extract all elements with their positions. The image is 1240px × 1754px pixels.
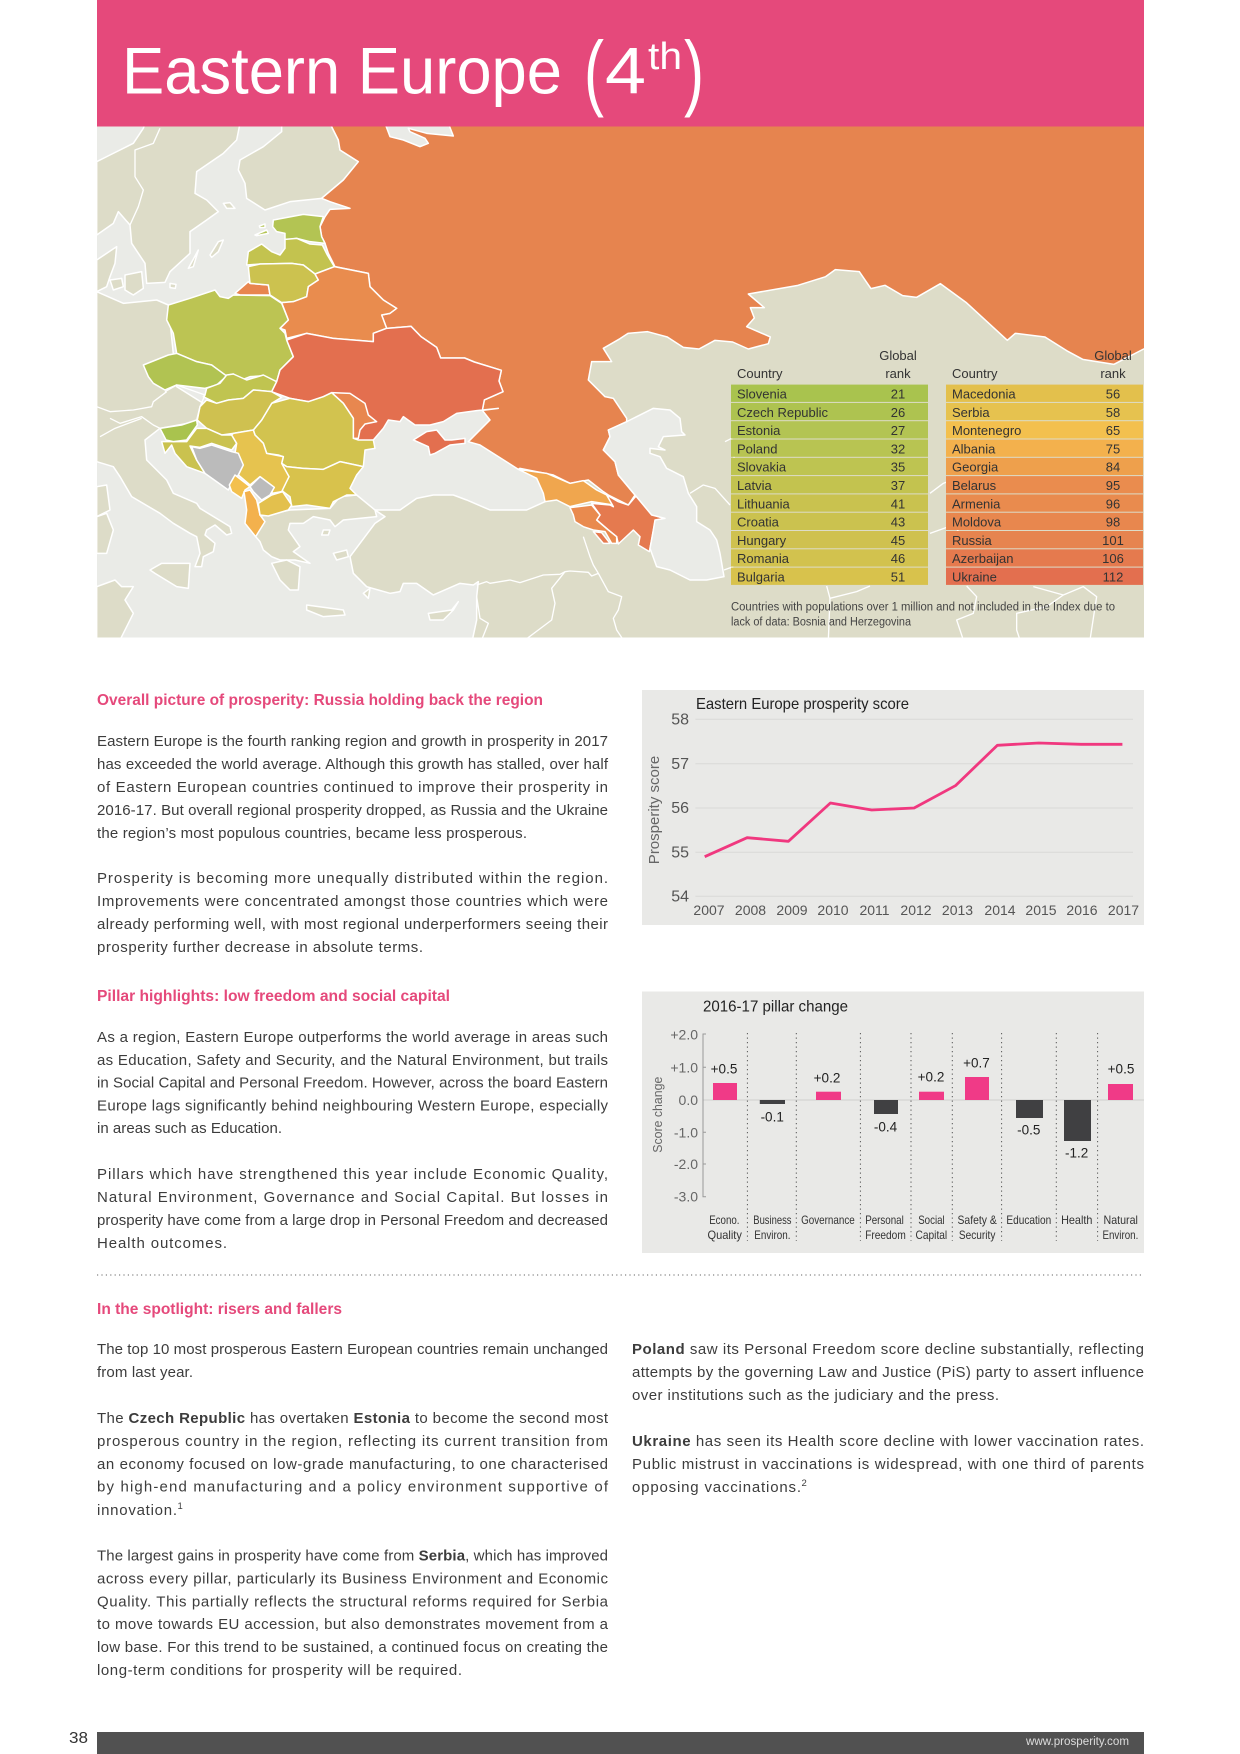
y-axis labels: 57 [671, 756, 689, 773]
heading: overall picture: Overall picture of prosperity: Russia holding back the region [97, 692, 543, 709]
row: Romania: 46 [891, 551, 905, 566]
row: Hungary: Hungary [737, 533, 787, 548]
row: Croatia [731, 513, 928, 530]
row: Lithuania: 41 [891, 496, 905, 511]
text block: Serbia: to move towards EU accession, but also demonstrates movement from a [97, 1616, 609, 1633]
region: Russia [320, 123, 1150, 505]
row: Montenegro [946, 421, 1143, 438]
y-axis labels: -1.0 [674, 1124, 698, 1140]
y-axis labels: -3.0 [674, 1189, 698, 1205]
row: Moldova: Moldova [952, 515, 1002, 530]
row: Armenia: Armenia [952, 496, 1001, 511]
text block: pillar highlights paragraph 1: Europe lags significantly behind neighbouring Western Europe, especially [97, 1098, 608, 1114]
x-axis labels: 2015 [1025, 902, 1057, 918]
text block: overall picture paragraph 1: Eastern Europe is the fourth ranking region and growth in prosperity in 2017 [97, 733, 608, 750]
y-axis labels [671, 712, 689, 906]
row: Montenegro: 65 [1106, 423, 1120, 438]
text block: pillar highlights paragraph 1: in Social Capital and Personal Freedom. However, across the board Eastern [97, 1074, 608, 1092]
y-axis labels: 55 [671, 844, 689, 862]
text block: Poland: attempts by the governing Law and Justice (PiS) party to assert influence [632, 1364, 1144, 1381]
country rank table: right: rank [1100, 366, 1126, 381]
text block: spotlight intro: The top 10 most prosperous Eastern European countries remain unchanged [97, 1341, 608, 1358]
x-axis labels: 2008 [735, 902, 766, 918]
pillar category labels: Environ. [754, 1228, 790, 1242]
country rank table: right [946, 348, 1143, 585]
x-axis labels: 2010 [817, 902, 849, 918]
text block: Serbia: Quality. This partially reflects the structural reforms required for Serbia [97, 1594, 609, 1610]
y-axis labels: -2.0 [674, 1156, 698, 1172]
row: Azerbaijan: Azerbaijan [952, 551, 1013, 566]
y-axis labels: 0.0 [679, 1092, 698, 1108]
row: Albania: Albania [952, 441, 996, 456]
map footnote: lack of data: Bosnia and Herzegovina [731, 617, 912, 629]
text block: Serbia: The largest gains in prosperity have come from Serbia, which has improved [97, 1548, 608, 1565]
bar value labels: -1.2 [1065, 1145, 1088, 1160]
country rank table: right: Global [1094, 348, 1132, 363]
row: Russia [946, 531, 1143, 548]
map footnote: Countries with populations over 1 million and not included in the Index due to [731, 602, 1115, 614]
pillar category labels: Business [753, 1213, 792, 1227]
pillar category labels: Econo. [709, 1213, 740, 1227]
text block: Czech Republic: 1 [178, 1501, 183, 1512]
text block: overall picture paragraph 2: Improvements were concentrated amongst those countries which were [97, 893, 608, 910]
row: Belarus: 95 [1106, 478, 1120, 493]
row: Bulgaria [731, 568, 928, 585]
text block: pillar highlights paragraph 2: Health outcomes. [97, 1235, 227, 1252]
line chart panel: Eastern Europe prosperity score: Eastern Europe prosperity score [696, 696, 909, 713]
text block: Serbia: across every pillar, particularly its Business Environment and Economic [97, 1570, 608, 1588]
text block: Ukraine [632, 1433, 1144, 1496]
row: Georgia [946, 458, 1143, 475]
row: Ukraine [946, 568, 1143, 585]
footer bar [97, 1732, 1144, 1754]
row: Estonia [731, 421, 928, 438]
text block: pillar highlights paragraph 2: prosperity have come from a large drop in Personal Freedom and decreased [97, 1212, 608, 1229]
country rank table: right: Country [952, 366, 998, 381]
pillar category labels: Quality [708, 1228, 742, 1242]
country rank table: left: Global [879, 348, 917, 363]
bar value labels: +0.2 [918, 1070, 944, 1085]
row: Azerbaijan [946, 549, 1143, 567]
row: Czech Republic: 26 [891, 405, 905, 420]
row: Estonia: Estonia [737, 423, 781, 438]
row: Moldova [946, 513, 1143, 530]
text block: Czech Republic: prosperous country in the region, reflecting its current transition from [97, 1433, 608, 1450]
row: Slovakia: Slovakia [737, 460, 787, 475]
row: Romania [731, 549, 928, 567]
x-axis labels: 2007 [693, 902, 725, 918]
bar chart panel: 2016-17 pillar change [642, 992, 1144, 1253]
row: Montenegro: Montenegro [952, 423, 1021, 438]
row: Georgia: 84 [1106, 460, 1120, 475]
text block: Ukraine: 2 [802, 1478, 807, 1489]
row: Czech Republic [731, 403, 928, 420]
text block: spotlight intro: from last year. [97, 1364, 193, 1381]
y-axis labels: +2.0 [670, 1026, 698, 1042]
text block: Serbia [97, 1548, 609, 1679]
text block: Poland [632, 1341, 1144, 1404]
row: Bulgaria: 51 [891, 570, 905, 584]
pillar category labels: Freedom [865, 1228, 906, 1242]
pillar category labels: Governance [801, 1213, 855, 1227]
text block: pillar highlights paragraph 1: As a region, Eastern Europe outperforms the world average in areas such [97, 1029, 608, 1046]
row: Serbia: Serbia [952, 405, 990, 420]
row: Slovakia [731, 458, 928, 475]
row: Croatia: Croatia [737, 515, 780, 530]
row: Armenia [946, 494, 1143, 512]
text block: Serbia: low base. For this trend to be sustained, a continued focus on creating the [97, 1639, 608, 1656]
x-axis labels: 2016 [1066, 902, 1098, 918]
footer bar: www.prosperity.com [1025, 1736, 1129, 1748]
text block: Serbia: long-term conditions for prosperity will be required. [97, 1662, 462, 1679]
bar value labels: +0.2 [814, 1070, 840, 1085]
pillar category labels: Education [1006, 1213, 1051, 1227]
row: Poland [731, 440, 928, 457]
row: Russia: 101 [1102, 533, 1124, 548]
row: Georgia: Georgia [952, 460, 999, 475]
map footnote [731, 602, 1115, 629]
text block: Poland: over institutions such as the judiciary and the press. [632, 1387, 999, 1404]
text block: pillar highlights paragraph 2: Natural Environment, Governance and Social Capital. But losses in [97, 1189, 608, 1206]
text block: Czech Republic: by high-end manufacturing and a policy environment supportive of [97, 1478, 609, 1496]
row: Czech Republic: Czech Republic [737, 405, 829, 420]
row: Latvia [731, 476, 928, 493]
row: Hungary: 45 [891, 533, 905, 548]
text block: Ukraine: Ukraine has seen its Health score decline with lower vaccination rates. [632, 1433, 1144, 1450]
text block: Czech Republic: an economy focused on low-grade manufacturing, to one characterised [97, 1456, 608, 1473]
text block: overall picture paragraph 1: of Eastern European countries continued to improve their prosperity in [97, 779, 608, 796]
text block: Czech Republic [97, 1410, 609, 1519]
row: Serbia [946, 403, 1143, 420]
row: Estonia: 27 [891, 423, 905, 438]
x-axis labels [693, 902, 1139, 918]
bar value labels: -0.5 [1017, 1122, 1040, 1137]
row: Moldova: 98 [1106, 515, 1120, 530]
bar value labels: +0.5 [711, 1061, 737, 1076]
row: Latvia: Latvia [737, 478, 772, 493]
y-axis labels: 58 [671, 712, 689, 728]
pillar category labels: Social [918, 1213, 945, 1227]
row: Lithuania [731, 494, 928, 512]
x-axis labels: 2017 [1108, 902, 1139, 918]
data line [705, 743, 1122, 857]
pillar category labels: Health [1061, 1213, 1092, 1227]
text block: overall picture paragraph 2: already performing well, with most regional underperformers seeing their [97, 916, 608, 933]
row: Armenia: 96 [1106, 496, 1120, 511]
pillar category labels [708, 1213, 1138, 1242]
bar value labels: +0.7 [963, 1056, 990, 1071]
row: Bulgaria: Bulgaria [737, 570, 785, 584]
border lines [97, 128, 1097, 640]
row: Serbia: 58 [1106, 405, 1120, 420]
y-axis labels [670, 1026, 698, 1205]
x-axis labels: 2012 [900, 902, 932, 918]
bar value labels: -0.4 [874, 1120, 898, 1135]
row: Azerbaijan: 106 [1102, 551, 1124, 566]
row: Macedonia [946, 385, 1143, 402]
bars [713, 1077, 1133, 1141]
text block: overall picture paragraph 1: the region’s most populous countries, became less prosperous. [97, 825, 527, 842]
row: Latvia: 37 [891, 478, 905, 493]
heading: pillar highlights: Pillar highlights: low freedom and social capital [97, 988, 450, 1005]
pillar category labels: Safety & [958, 1213, 997, 1227]
text block: Czech Republic: innovation. [97, 1502, 177, 1519]
pillar category labels: Natural [1104, 1213, 1138, 1227]
row: Romania: Romania [737, 551, 790, 566]
bar value labels: -0.1 [761, 1110, 784, 1125]
row: Albania: 75 [1106, 441, 1120, 456]
text block: pillar highlights paragraph 1: in areas such as Education. [97, 1120, 282, 1137]
country rank table: left: Country [737, 366, 783, 381]
text block: overall picture paragraph 1 [97, 733, 609, 842]
pillar category labels: Environ. [1102, 1228, 1138, 1242]
row: Ukraine: Ukraine [952, 570, 997, 584]
pillar category labels: Security [959, 1228, 995, 1242]
text block: pillar highlights paragraph 2: Pillars which have strengthened this year include Economic Quality, [97, 1166, 608, 1183]
row: Slovenia: Slovenia [737, 386, 788, 402]
line chart panel: Eastern Europe prosperity score [642, 690, 1144, 925]
title banner: th [648, 36, 682, 78]
bar chart panel: 2016-17 pillar change: 2016-17 pillar change [703, 999, 848, 1016]
title banner: ( [584, 24, 604, 118]
title banner: 4 [605, 34, 646, 108]
row: Poland: Poland [737, 441, 777, 456]
x-axis labels: 2009 [776, 902, 808, 918]
title banner [97, 0, 1144, 126]
y-axis labels: +1.0 [670, 1059, 698, 1075]
x-axis labels: 2011 [859, 902, 890, 918]
text block: Czech Republic: The Czech Republic has overtaken Estonia to become the second most [97, 1410, 609, 1427]
page number: 38 [69, 1730, 88, 1747]
row: Macedonia: Macedonia [952, 386, 1016, 402]
text block: pillar highlights paragraph 2 [97, 1166, 608, 1252]
text block: overall picture paragraph 1: has exceeded the world average. Although this growth has stalled, over half [97, 756, 609, 773]
y-axis labels: 56 [671, 800, 689, 817]
text block: pillar highlights paragraph 1: as Education, Safety and Security, and the Natural Environment, but trails [97, 1052, 608, 1069]
bar value labels: +0.5 [1108, 1061, 1134, 1076]
row: Belarus: Belarus [952, 478, 997, 493]
title banner: Eastern Europe [122, 34, 562, 108]
row: Slovenia [731, 385, 928, 402]
row: Poland: 32 [891, 441, 905, 456]
text block: Ukraine: opposing vaccinations. [632, 1479, 801, 1496]
x-axis labels: 2014 [984, 902, 1016, 918]
country rank table: left [731, 348, 928, 585]
text block: Ukraine: Public mistrust in vaccinations is widespread, with one third of parents [632, 1456, 1144, 1473]
y-axis title: Score change [650, 1077, 665, 1153]
text block: Poland: Poland saw its Personal Freedom score decline substantially, reflecting [632, 1341, 1144, 1358]
row: Slovenia: 21 [891, 386, 905, 402]
pillar category labels: Personal [865, 1213, 904, 1227]
row: Hungary [731, 531, 928, 548]
row: Russia: Russia [952, 533, 993, 548]
heading: in the spotlight: In the spotlight: risers and fallers [97, 1301, 342, 1318]
text block: spotlight intro [97, 1341, 608, 1381]
row: Slovakia: 35 [891, 460, 905, 475]
row: Croatia: 43 [891, 515, 905, 530]
row: Lithuania: Lithuania [737, 496, 791, 511]
row: Ukraine: 112 [1103, 570, 1123, 584]
text block: overall picture paragraph 2: prosperity further decrease in absolute terms. [97, 939, 423, 956]
y-axis labels: 54 [671, 888, 689, 906]
y-axis title: Prosperity score [646, 756, 663, 864]
text block: overall picture paragraph 2: Prosperity is becoming more unequally distributed within the region. [97, 870, 608, 887]
text block: pillar highlights paragraph 1 [97, 1029, 608, 1137]
row: Albania [946, 440, 1143, 457]
row: Macedonia: 56 [1106, 386, 1120, 402]
text block: overall picture paragraph 1: 2016-17. But overall regional prosperity dropped, as Russia and the Ukraine [97, 802, 608, 819]
title banner: ) [684, 24, 704, 118]
country rank table: left: rank [885, 366, 911, 381]
row: Belarus [946, 476, 1143, 493]
map of Eastern Europe [97, 123, 1150, 643]
text block: overall picture paragraph 2 [97, 870, 608, 956]
pillar category labels: Capital [916, 1228, 947, 1242]
bar value labels [711, 1056, 1134, 1160]
x-axis labels: 2013 [942, 902, 973, 918]
